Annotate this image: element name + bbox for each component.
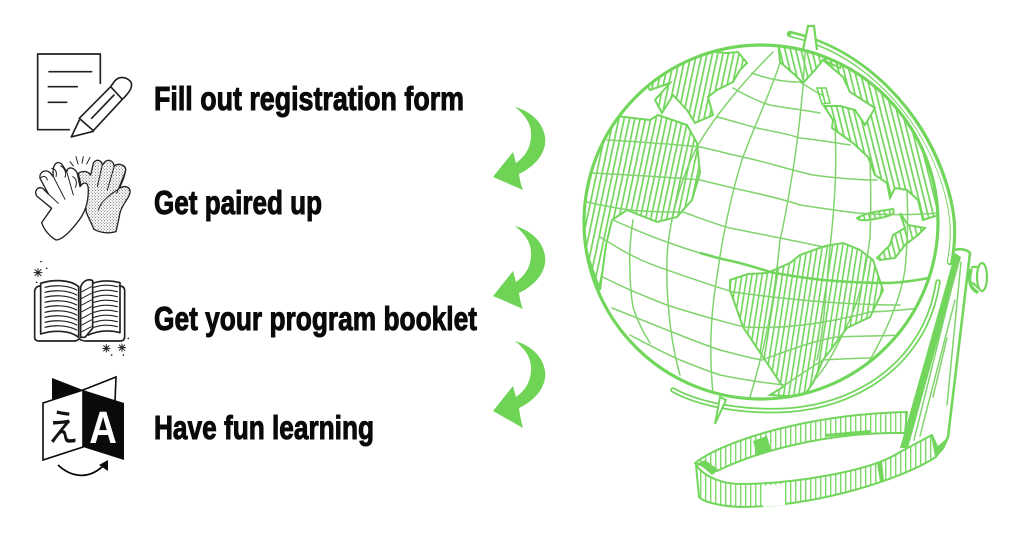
- icon: high five hands: [36, 157, 130, 240]
- continent: Greenland cap: [778, 47, 842, 84]
- icon: translation booklet: え: [48, 397, 78, 452]
- heading: get your program booklet: Get your program booklet: [154, 300, 477, 337]
- island: Caribbean: [857, 209, 894, 220]
- arrow: step two to three: [493, 226, 545, 309]
- globe stand arm: [900, 249, 987, 448]
- icon: form and pencil: [38, 54, 132, 137]
- globe outline: [584, 45, 938, 399]
- continent: Central America: [877, 213, 925, 260]
- globe sphere: [575, 40, 950, 399]
- meridian ring: [673, 26, 953, 424]
- heading: have fun learning: Have fun learning: [154, 409, 374, 446]
- continent: Africa: [575, 115, 700, 290]
- island: Arctic: [817, 88, 830, 104]
- continent: South America: [730, 243, 883, 397]
- icon: translation booklet: A: [89, 402, 117, 453]
- continent: Europe: [640, 50, 747, 123]
- arrow: step one to two: [493, 107, 545, 190]
- equator: [700, 253, 933, 283]
- icon: translation booklet: [43, 377, 124, 475]
- illustration: globe on stand: [575, 26, 987, 507]
- right dotted hand: [78, 160, 130, 233]
- continent: North America: [821, 58, 936, 222]
- base ring: [695, 412, 948, 507]
- icon: open book with sparkles: [34, 261, 129, 356]
- left white hand: [36, 163, 88, 240]
- heading: get paired up: Get paired up: [154, 184, 322, 221]
- heading: fill out registration form: Fill out registration form: [154, 80, 464, 117]
- arrow: step three to four: [493, 341, 545, 428]
- grid lines: [587, 52, 937, 397]
